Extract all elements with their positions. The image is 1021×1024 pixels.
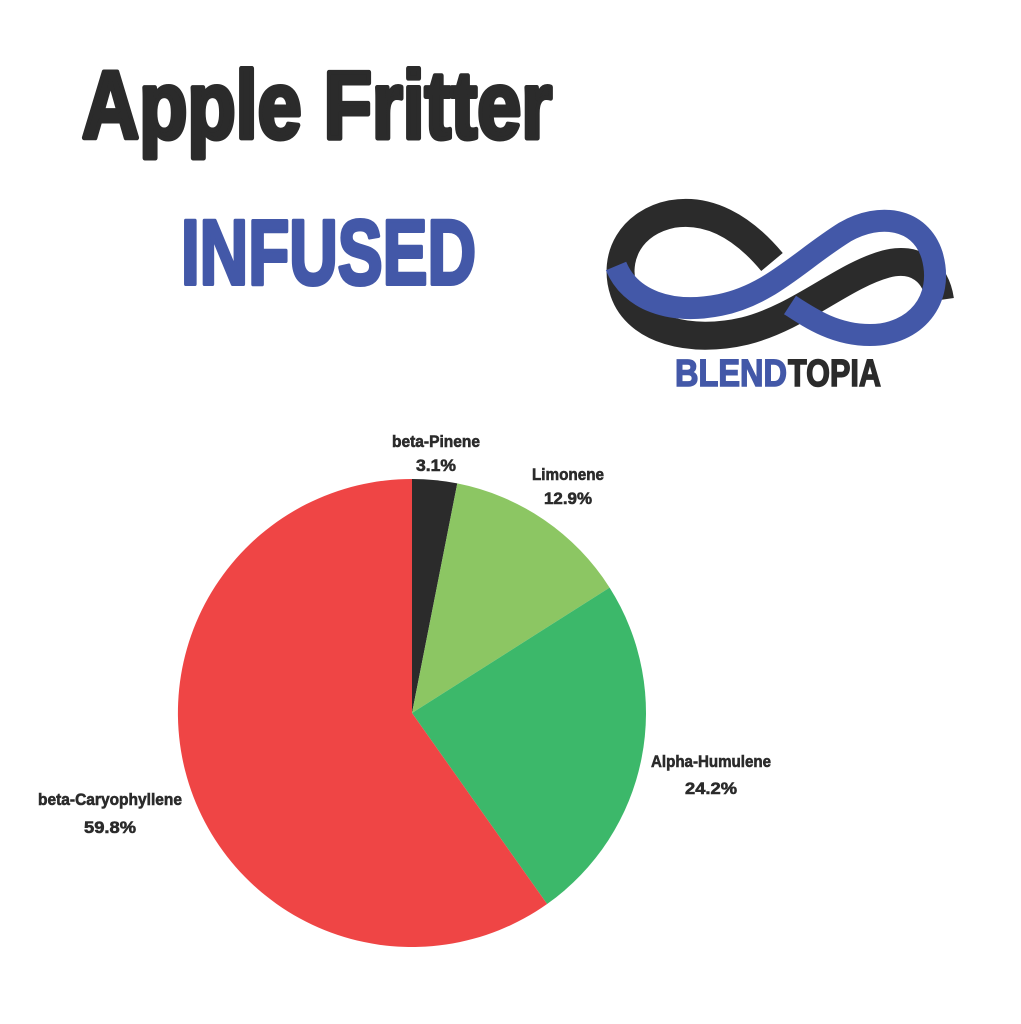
logo wordmark	[675, 353, 881, 395]
label: beta-Pinene: beta-Pinene	[392, 432, 480, 451]
label: Limonene: Limonene	[532, 465, 604, 484]
icon: infinity black band	[621, 213, 940, 336]
label: beta-Caryophyllene: beta-Caryophyllene	[38, 790, 182, 809]
slice: Limonene	[412, 483, 610, 713]
label: beta-Caryophyllene: 59.8%	[84, 818, 136, 837]
label: Alpha-Humulene	[651, 752, 771, 798]
title: Apple Fritter	[82, 52, 552, 159]
label: Alpha-Humulene: Alpha-Humulene	[651, 752, 771, 771]
logo wordmark: TOPIA	[788, 353, 881, 395]
label: Limonene	[532, 465, 604, 508]
label: Alpha-Humulene: 24.2%	[685, 779, 737, 798]
label: beta-Pinene: 3.1%	[416, 456, 456, 475]
pie chart	[178, 479, 646, 947]
label: beta-Caryophyllene	[38, 790, 182, 837]
slice: Alpha-Humulene	[412, 588, 646, 904]
subtitle: infused: INFUSED	[181, 202, 476, 304]
slice: beta-Pinene	[412, 479, 457, 713]
label: beta-Pinene	[392, 432, 480, 475]
label: Limonene: 12.9%	[544, 489, 592, 508]
logo wordmark: BLEND	[675, 353, 787, 395]
slice: beta-Caryophyllene	[178, 479, 547, 947]
icon: infinity blue band	[616, 221, 935, 335]
logo: blendtopia	[616, 213, 940, 395]
